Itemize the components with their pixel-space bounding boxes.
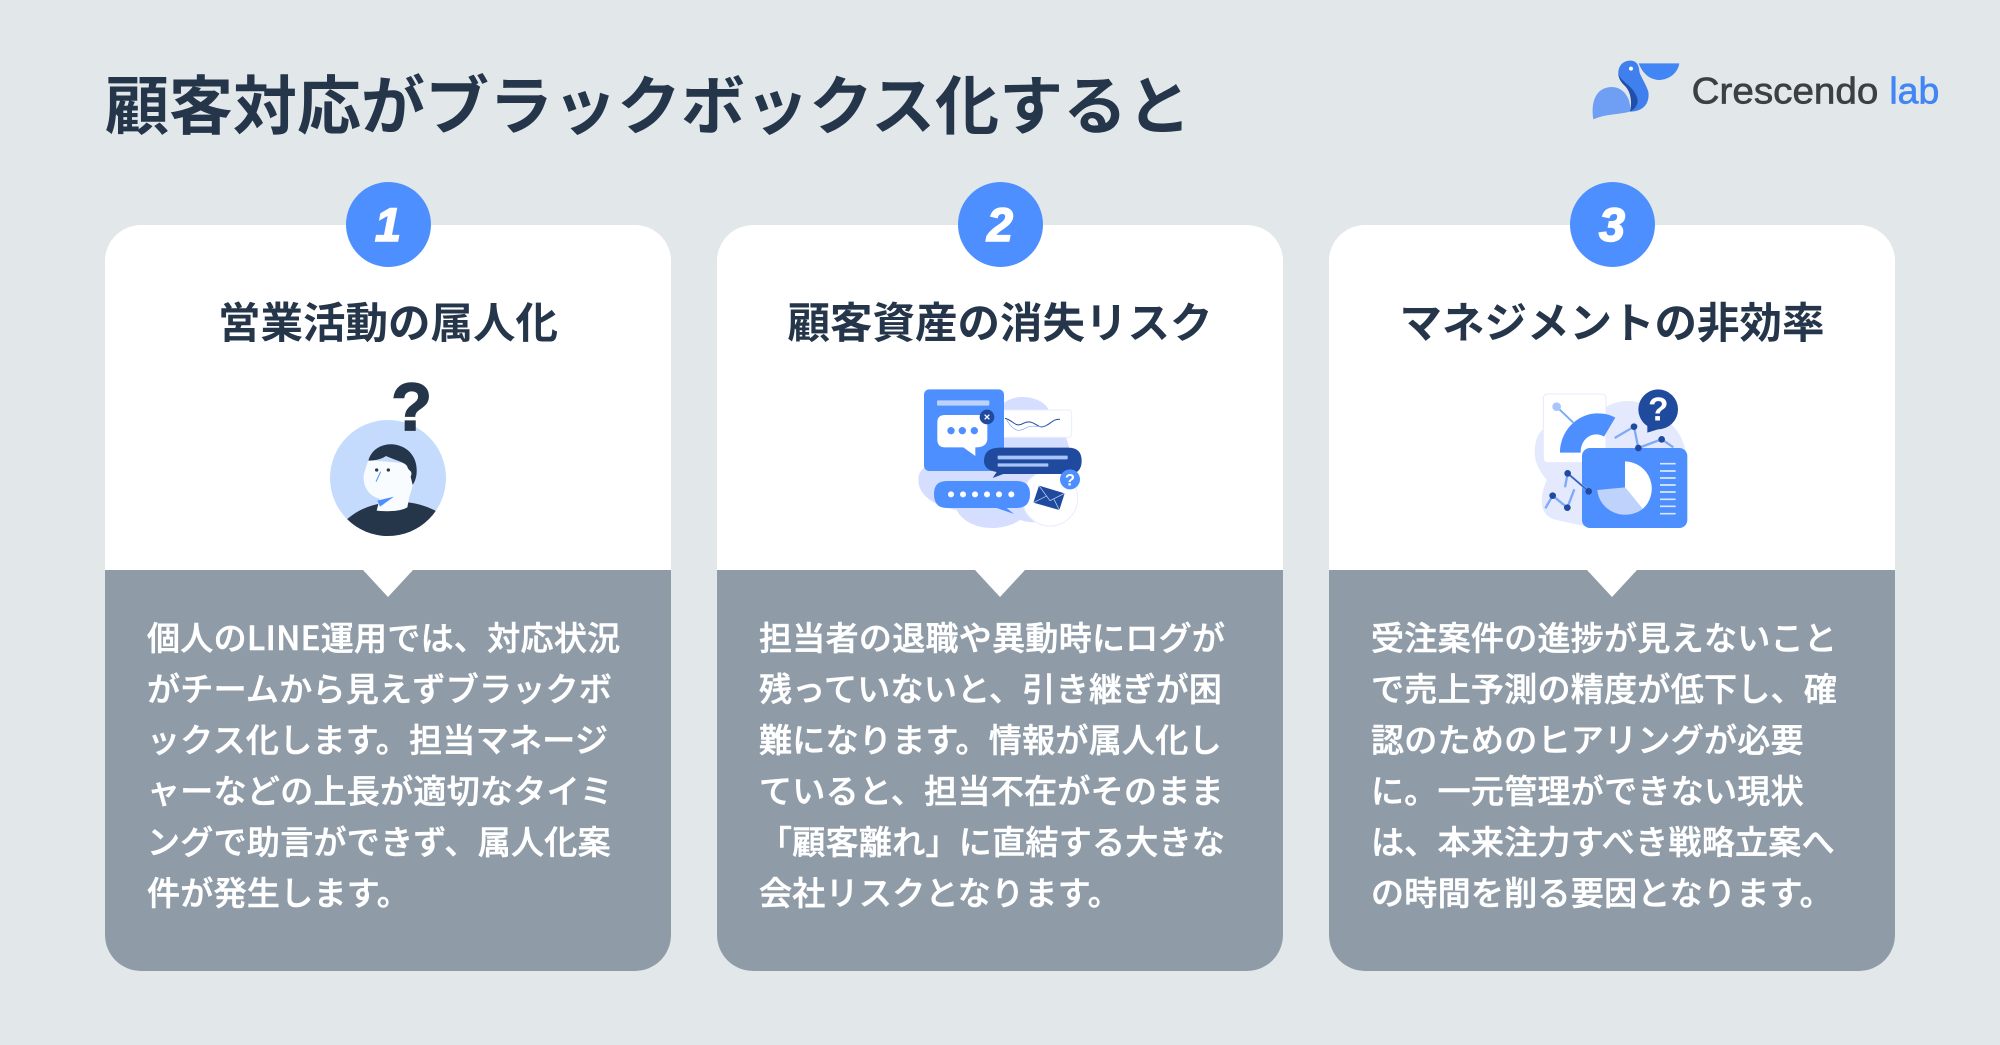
body text: は、本来注力すべき戦略立案へ <box>1371 816 1835 864</box>
body text: 残っていないと、引き継ぎが困 <box>759 663 1222 711</box>
panel: 営業活動の属人化 <box>105 225 671 971</box>
heading: 顧客資産の消失リスク <box>787 290 1212 351</box>
panel: マネジメントの非効率 <box>1329 225 1895 971</box>
body text: 「顧客離れ」に直結する大きな <box>759 816 1225 864</box>
body text: 受注案件の進捗が見えないこと <box>1371 612 1837 660</box>
badge 3: 3 <box>1599 198 1625 251</box>
body text: ていると、担当不在がそのまま <box>759 765 1224 813</box>
icon: dashboards and charts: ? <box>1648 392 1669 429</box>
icon: chat bubbles and mail <box>918 389 1082 528</box>
body text: がチームから見えずブラックボ <box>147 663 612 711</box>
body text: 個人のLINE運用では、対応状況 <box>147 612 620 660</box>
badge 1: 1 <box>375 198 401 251</box>
body text: 件が発生します。 <box>147 867 410 915</box>
badge 1 <box>346 182 430 267</box>
title: 顧客対応がブラックボックス化すると <box>105 56 1191 148</box>
heading: マネジメントの非効率 <box>1399 290 1824 351</box>
body text: 会社リスクとなります。 <box>759 867 1121 915</box>
panel: 顧客資産の消失リスク <box>717 225 1283 971</box>
body text: 難になります。情報が属人化し <box>759 714 1222 762</box>
body text <box>1371 612 1837 915</box>
icon: person with question mark <box>330 371 446 536</box>
body text: ングで助言ができず、属人化案 <box>147 816 611 864</box>
icon: dashboards and charts <box>1534 389 1688 528</box>
body text: 担当者の退職や異動時にログが <box>759 612 1225 660</box>
badge 3 <box>1570 182 1654 267</box>
body text <box>147 612 620 915</box>
body text: 認のためのヒアリングが必要 <box>1371 714 1804 762</box>
logo: Crescendo lab <box>1592 60 1939 120</box>
body text <box>759 612 1225 915</box>
logo: Crescendo lab: lab <box>1889 69 1939 111</box>
icon: chat bubbles and mail: ? <box>1065 470 1075 489</box>
notch <box>1587 570 1637 597</box>
lower panel <box>105 570 671 971</box>
badge 2 <box>958 182 1042 267</box>
body text: ックス化します。担当マネージ <box>147 714 608 762</box>
body text: ャーなどの上長が適切なタイミ <box>147 765 613 813</box>
lower panel <box>1329 570 1895 971</box>
body text: の時間を削る要因となります。 <box>1371 867 1833 915</box>
icon: person with question mark: ? <box>391 371 432 445</box>
body text: で売上予測の精度が低下し、確 <box>1371 663 1837 711</box>
notch <box>975 570 1025 597</box>
notch <box>363 570 413 597</box>
heading: 営業活動の属人化 <box>218 290 558 351</box>
badge 2: 2 <box>987 198 1013 251</box>
logo: Crescendo lab: Crescendo <box>1692 69 1878 111</box>
body text: に。一元管理ができない現状 <box>1371 765 1804 813</box>
lower panel <box>717 570 1283 971</box>
